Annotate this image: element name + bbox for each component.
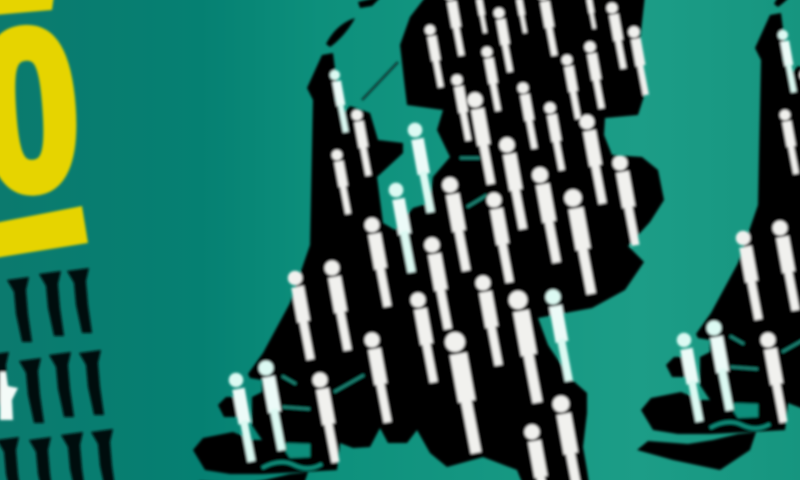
people: [229, 0, 646, 480]
Afsluitdijk line: [362, 62, 398, 100]
Southern islands: [189, 472, 308, 480]
yellow underline bar: [0, 206, 88, 258]
Schouwen island: [218, 397, 240, 417]
map of the Netherlands with people: [189, 0, 664, 480]
white star icon: [0, 372, 18, 420]
Delta waterways: [282, 158, 487, 409]
small black figures: [0, 268, 116, 480]
second map of the Netherlands: [637, 0, 800, 476]
Wadden islands: [326, 18, 355, 47]
yellow top bar: [0, 0, 54, 15]
